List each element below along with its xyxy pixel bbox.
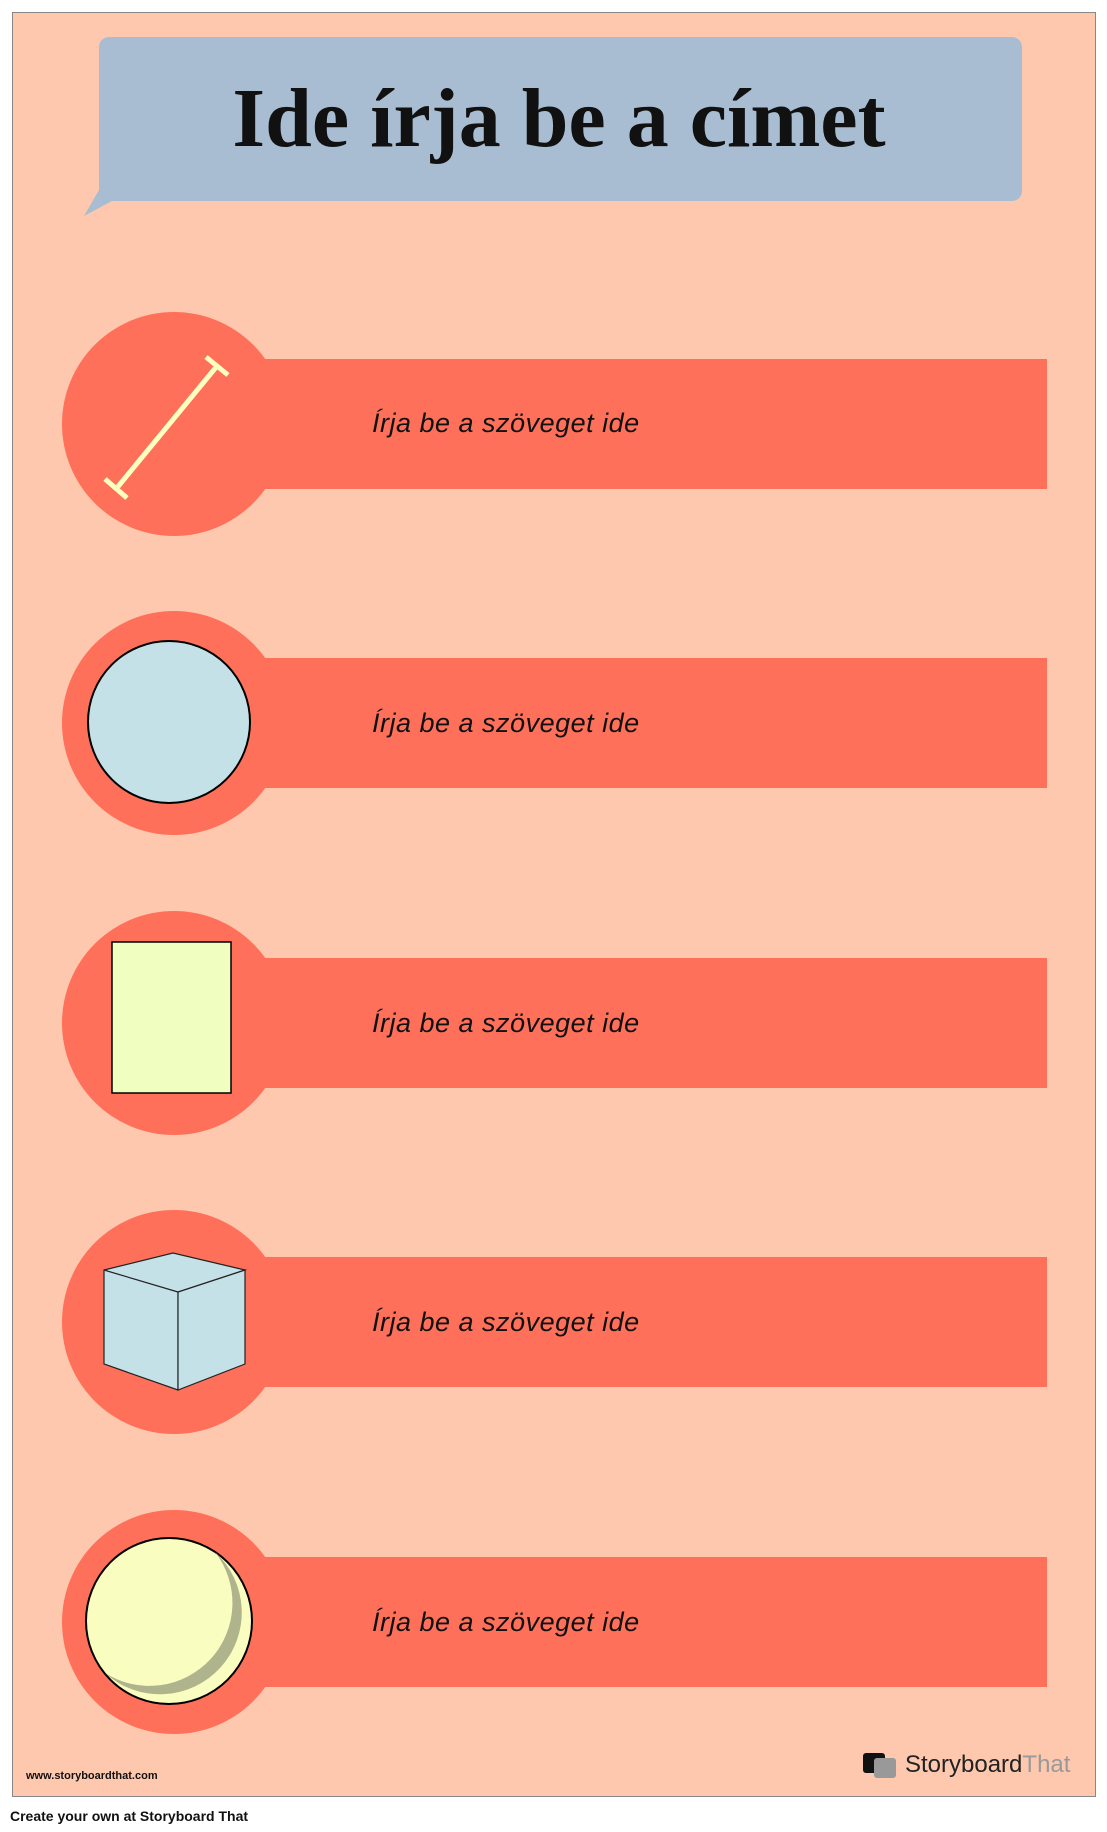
row 2 bbox=[62, 611, 1047, 835]
icon: sphere bbox=[86, 1538, 252, 1704]
logo icon bbox=[863, 1753, 896, 1778]
row 5 bbox=[62, 1510, 1047, 1734]
title bubble: Ide írja be a címet bbox=[232, 72, 886, 165]
text 3: Írja be a szöveget ide bbox=[372, 1008, 640, 1038]
text 5: Írja be a szöveget ide bbox=[372, 1607, 640, 1637]
footer url: www.storyboardthat.com bbox=[26, 1770, 158, 1782]
text 1: Írja be a szöveget ide bbox=[372, 408, 640, 438]
text 2: Írja be a szöveget ide bbox=[372, 708, 640, 738]
row 4 bbox=[62, 1210, 1047, 1434]
text 4: Írja be a szöveget ide bbox=[372, 1307, 640, 1337]
logo text: StoryboardThat bbox=[905, 1751, 1070, 1778]
icon: line segment bbox=[105, 357, 228, 498]
title bubble bbox=[84, 37, 1022, 216]
icon: cube bbox=[104, 1253, 245, 1390]
icon: circle bbox=[88, 641, 250, 803]
bottom caption: Create your own at Storyboard That bbox=[10, 1808, 248, 1824]
row 1 bbox=[62, 312, 1047, 536]
icon: rectangle bbox=[112, 942, 231, 1093]
row 3 bbox=[62, 911, 1047, 1135]
